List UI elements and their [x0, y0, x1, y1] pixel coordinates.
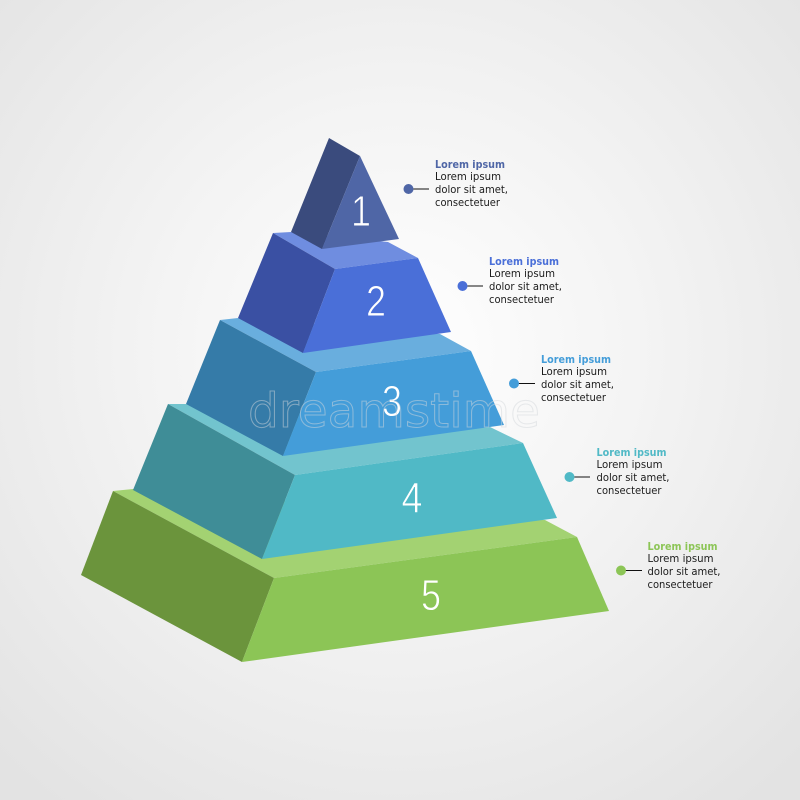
callout 1: dolor sit amet,: [435, 184, 508, 196]
pyramid tier 5: [81, 489, 609, 662]
callout 3: Lorem ipsum: [541, 354, 611, 366]
callout 5: consectetuer: [648, 579, 713, 591]
callout 1: Lorem ipsum: [435, 171, 501, 183]
pyramid tier 4: [133, 404, 557, 559]
number 3: 3: [382, 377, 402, 426]
callout 5: [616, 541, 720, 591]
callout 4: [564, 447, 670, 497]
number 2: 2: [366, 277, 386, 326]
number 5: 5: [421, 571, 441, 620]
callout 4: Lorem ipsum: [596, 447, 667, 459]
callout 3: Lorem ipsum: [541, 366, 607, 378]
callout 3: dolor sit amet,: [541, 379, 614, 391]
callout 4: dolor sit amet,: [596, 472, 670, 484]
pyramid tier 3: [186, 318, 504, 456]
callout 1: [404, 159, 508, 209]
callout 2: dolor sit amet,: [489, 281, 562, 293]
callout 2: Lorem ipsum: [489, 268, 555, 280]
callout 5: Lorem ipsum: [648, 541, 718, 553]
number 4: 4: [402, 474, 422, 523]
callout 2: Lorem ipsum: [489, 256, 559, 268]
callout 5: dolor sit amet,: [648, 566, 720, 578]
callout 4: consectetuer: [596, 485, 662, 497]
callout 4: Lorem ipsum: [596, 459, 662, 471]
pyramid tier 2: [238, 232, 451, 353]
callout 2: consectetuer: [489, 294, 555, 306]
pyramid tier 1: [291, 138, 399, 249]
callout 1: consectetuer: [435, 197, 501, 209]
callout 1: Lorem ipsum: [435, 159, 505, 171]
number 1: 1: [351, 187, 371, 236]
callout 3: consectetuer: [541, 392, 607, 404]
watermark: dreamstime: [248, 384, 540, 439]
callout 2: [458, 256, 562, 306]
callout 5: Lorem ipsum: [648, 553, 714, 565]
callout 3: [509, 354, 614, 404]
